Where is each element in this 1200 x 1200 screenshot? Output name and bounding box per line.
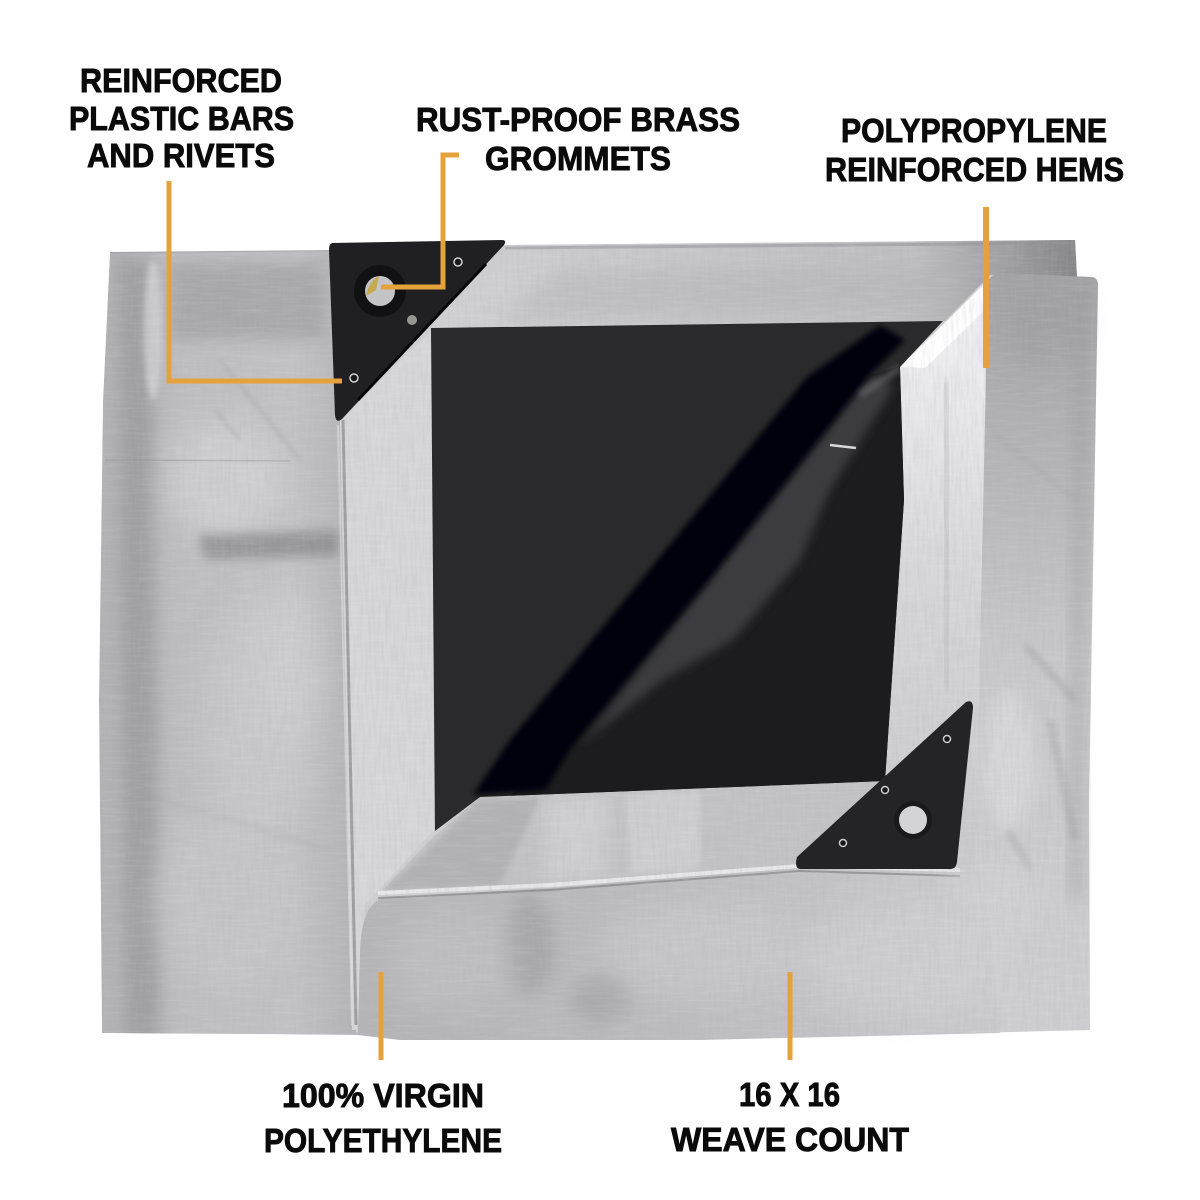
text: 16 x 16 weave count [671,1076,909,1158]
text: rust-proof brass grommets: GROMMETS [485,140,671,177]
text: rust-proof brass grommets [416,101,740,177]
text: reinforced plastic bars and rivets: REINFORCED [80,62,282,99]
arrow: weave count leader [788,972,792,1060]
arrow: plastic bars leader [169,181,342,381]
text: 100% virgin polyethylene: POLYETHYLENE [264,1122,502,1159]
arrow: polyethylene leader [378,972,384,1060]
arrow: hems leader [983,207,989,368]
panel: lower front fold [358,860,1050,1040]
text: reinforced plastic bars and rivets [69,62,294,174]
panel: right light flap [886,283,988,880]
icon: brass grommet [354,265,406,317]
panel: right folded section [975,273,1098,1033]
text: rust-proof brass grommets: RUST-PROOF BRASS [416,101,740,138]
icon: bottom-right corner reinforcement [796,701,973,869]
icon: top-left corner reinforcement [329,240,505,421]
tarp photo [95,235,1105,1045]
panel: lower diagonal fold band [380,781,886,893]
panel: top band and light border [338,240,1077,1033]
text: 100% virgin polyethylene [264,1077,502,1159]
icon: rivets [350,258,462,382]
text: reinforced plastic bars and rivets: AND RIVETS [87,137,275,174]
weave texture [95,235,1105,1045]
arrow: grommets leader [381,155,459,287]
panel: black inner square [425,315,950,840]
text: polypropylene reinforced hems: REINFORCED HEMS [825,151,1124,188]
text: polypropylene reinforced hems [825,112,1124,188]
icon: grommet hole [894,801,932,839]
text: 16 x 16 weave count: WEAVE COUNT [671,1121,909,1158]
panel: left silver folded section [99,250,360,1040]
text: polypropylene reinforced hems: POLYPROPYLENE [841,112,1107,149]
text: 100% virgin polyethylene: 100% VIRGIN [282,1077,484,1114]
text: reinforced plastic bars and rivets: PLASTIC BARS [69,100,294,137]
icon: small rivets [840,736,950,846]
text: 16 x 16 weave count: 16 X 16 [739,1076,840,1113]
